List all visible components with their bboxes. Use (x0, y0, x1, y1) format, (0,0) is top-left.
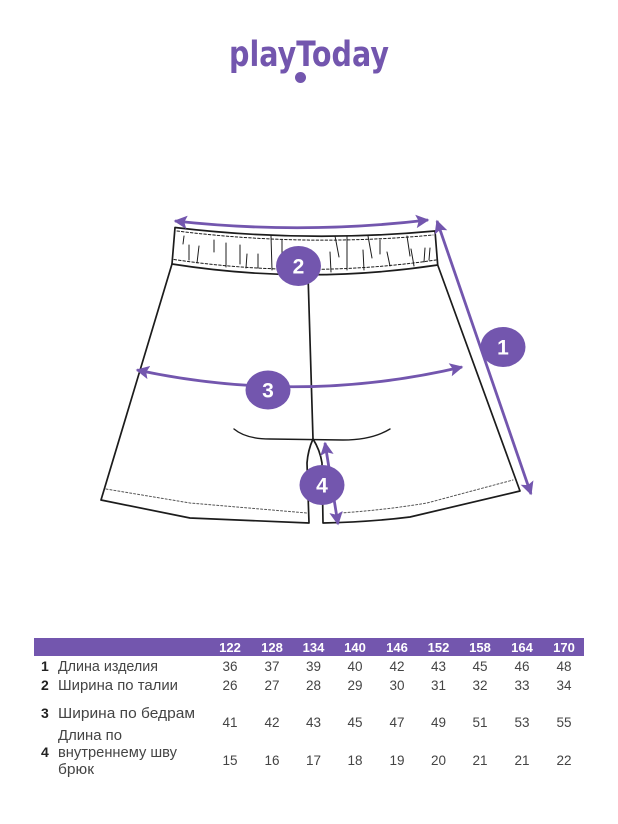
row 3: hips: 45 (347, 715, 363, 730)
table header: 122 (219, 640, 241, 655)
row 3: hips: 43 (306, 715, 321, 730)
row 4: inseam: 17 (306, 753, 321, 768)
logo: playToday: playToday (229, 35, 389, 75)
row 1: length (41, 658, 572, 675)
table header: 170 (553, 640, 575, 655)
row 2: waist: 33 (514, 678, 530, 693)
row 1: length: 40 (347, 659, 363, 674)
table header: 158 (469, 640, 491, 655)
badge 3: 3 (262, 380, 274, 402)
row 3: hips: 55 (556, 715, 572, 730)
shorts technical drawing (101, 228, 520, 523)
row 4: inseam: 18 (347, 753, 363, 768)
row 1: length: 1 (41, 658, 49, 674)
shorts body outline (101, 264, 313, 523)
badge 1 (480, 327, 526, 367)
row 2: waist: 28 (306, 678, 321, 693)
row 2: waist (41, 677, 572, 694)
row 1: length: 45 (472, 659, 488, 674)
row 3: hips: 49 (431, 715, 446, 730)
row 3: hips: 41 (222, 715, 238, 730)
row 3: hips: 3 (41, 705, 49, 721)
hem stitching (106, 480, 513, 513)
row 4: inseam: 21 (514, 753, 530, 768)
row 4: inseam: 4 (41, 744, 49, 760)
badge 4: 4 (316, 474, 328, 498)
row 4: inseam: 22 (556, 753, 572, 768)
row 2: waist: 31 (431, 678, 446, 693)
row 4: inseam: Длина по (58, 728, 122, 744)
arrow 1: length (437, 221, 531, 494)
table header: 134 (303, 640, 325, 655)
table header: 164 (511, 640, 534, 655)
row 1: length: 48 (556, 659, 572, 674)
badge 3 (246, 370, 290, 410)
row 1: length: 36 (222, 659, 238, 674)
row 1: length: 37 (264, 659, 280, 674)
row 1: length: 46 (514, 659, 530, 674)
badge 4 (300, 465, 344, 505)
row 1: length: 43 (431, 659, 446, 674)
size table (34, 638, 584, 778)
row 1: length: 42 (389, 659, 405, 674)
row 3: hips: 47 (389, 715, 405, 730)
arrow 2: waist (175, 220, 428, 228)
row 4: inseam: 19 (389, 753, 405, 768)
row 3: hips: 53 (514, 715, 530, 730)
row 2: waist: Ширина по талии (58, 678, 178, 694)
row 2: waist: 29 (347, 678, 363, 693)
row 3: hips: Ширина по бедрам (58, 706, 195, 722)
badge 2: 2 (293, 256, 304, 278)
row 1: length: 39 (306, 659, 321, 674)
badge 2 (276, 246, 321, 286)
crotch seam (234, 429, 390, 440)
table header: 146 (386, 640, 408, 655)
row 3: hips: 51 (472, 715, 488, 730)
row 4: inseam: 15 (222, 753, 238, 768)
row 1: length: Длина изделия (58, 659, 158, 675)
row 4: inseam: 21 (472, 753, 488, 768)
badge 1: 1 (497, 336, 509, 360)
table header: 128 (261, 640, 283, 655)
row 4: inseam: 20 (431, 753, 446, 768)
row 4: inseam: 16 (264, 753, 280, 768)
row 2: waist: 32 (472, 678, 488, 693)
arrow 3: hips (137, 367, 462, 387)
row 2: waist: 34 (556, 678, 572, 693)
row 2: waist: 26 (222, 678, 238, 693)
table header (34, 638, 584, 656)
arrow 4: inseam (325, 443, 338, 524)
row 4: inseam (41, 728, 572, 778)
row 2: waist: 27 (264, 678, 280, 693)
row 3: hips (41, 705, 572, 730)
row 3: hips: 42 (264, 715, 280, 730)
table header: 152 (428, 640, 449, 655)
table header: 140 (344, 640, 366, 655)
row 2: waist: 30 (389, 678, 405, 693)
row 2: waist: 2 (41, 677, 49, 693)
row 4: inseam: внутреннему шву (58, 745, 178, 761)
waistband (172, 228, 438, 275)
row 4: inseam: брюк (58, 762, 95, 778)
